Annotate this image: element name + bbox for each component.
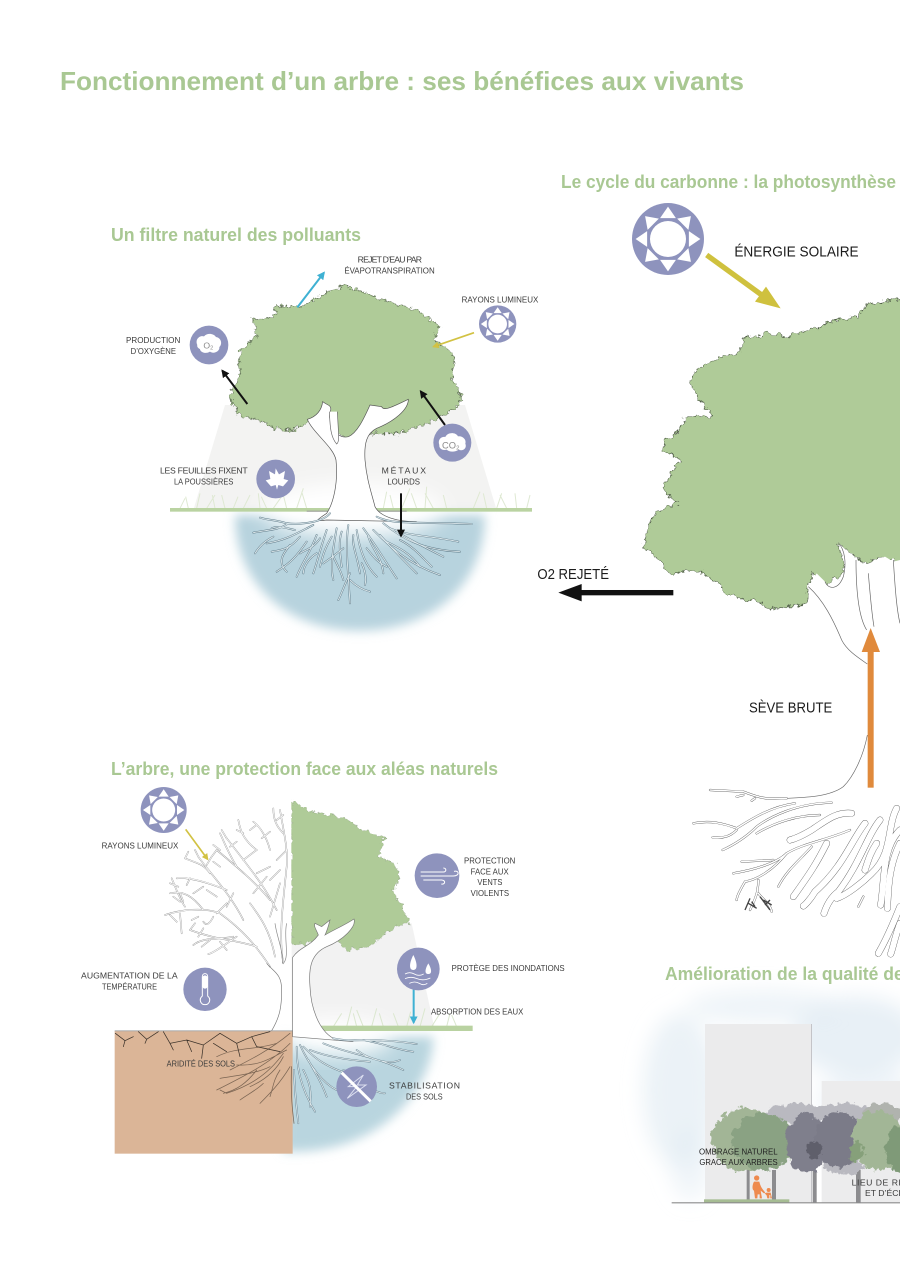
trunk xyxy=(307,399,417,522)
grass strip xyxy=(704,1199,789,1202)
canopy xyxy=(230,285,463,437)
grey shade under canopy xyxy=(193,405,497,510)
label: meeting place xyxy=(852,1177,900,1198)
label: O2 released: O2 REJETÉ xyxy=(537,566,609,583)
arrow: water absorption xyxy=(411,989,417,1023)
panel: protection face aux aléas xyxy=(81,759,565,1154)
labels: ABSORPTION DES EAUX xyxy=(431,1007,524,1017)
tree canopies xyxy=(712,1103,900,1173)
icon: CO2 xyxy=(433,424,471,462)
labels: VENTS xyxy=(477,877,503,887)
panel: amélioration de la qualité de vie xyxy=(643,964,900,1203)
bare tree xyxy=(165,808,287,1031)
arrow: raw sap xyxy=(862,628,880,788)
illustration: tree with pollutant filter xyxy=(126,254,539,631)
trunk left edge xyxy=(787,640,867,798)
big canopy xyxy=(643,287,900,610)
illustration: street scene xyxy=(643,990,900,1203)
labels: MÉTAUX xyxy=(382,465,426,475)
arrow: light rays xyxy=(433,333,474,347)
tree trunks xyxy=(747,1170,861,1202)
arrow: O2 released xyxy=(558,584,673,601)
arid soil xyxy=(115,1031,293,1154)
labels: STABILISATION xyxy=(389,1080,460,1090)
illustration: trunk and roots xyxy=(693,628,900,954)
icon: sun xyxy=(632,203,704,275)
heading: filtre: Un filtre naturel des polluants xyxy=(111,225,361,245)
illustration: photosynthesis canopy xyxy=(537,203,900,643)
ground line xyxy=(672,1202,900,1203)
labels xyxy=(126,254,539,486)
roots xyxy=(693,790,900,954)
icon: oxygen xyxy=(190,326,228,364)
sky haze xyxy=(643,990,900,1200)
people xyxy=(752,1175,772,1198)
grass xyxy=(115,1007,473,1031)
clean canopy edge mask xyxy=(277,793,291,950)
labels: LA POUSSIÈRES xyxy=(174,476,234,486)
title: Fonctionnement d’un arbre : ses bénéfices aux vivants xyxy=(60,66,744,96)
labels: PRODUCTION xyxy=(126,335,180,345)
icon: CO2: CO₂ xyxy=(442,441,460,451)
labels: FACE AUX xyxy=(471,866,509,876)
soil water zone xyxy=(235,515,485,631)
labels: PROTÈGE DES INONDATIONS xyxy=(452,963,565,973)
heading: cycle: Le cycle du carbonne : la photosynthèse xyxy=(561,172,896,192)
trunk outlines xyxy=(808,543,900,640)
labels: RAYONS LUMINEUX xyxy=(102,840,179,850)
panel: cycle du carbone xyxy=(537,172,900,954)
arrow: CO2 xyxy=(421,391,445,425)
arrow: solar energy xyxy=(707,255,781,308)
labels: LOURDS xyxy=(387,476,420,486)
labels: RAYONS LUMINEUX xyxy=(462,294,539,304)
icon: water drops xyxy=(397,948,440,990)
label: shade: GRACE AUX ARBRES xyxy=(699,1157,778,1167)
labels: D’OXYGÈNE xyxy=(131,346,176,356)
label: shade xyxy=(699,1146,778,1167)
arrow: oxygen xyxy=(222,371,247,404)
water zone xyxy=(283,1037,433,1152)
building right xyxy=(822,1081,900,1202)
labels: DES SOLS xyxy=(406,1091,443,1101)
dry roots and cracks xyxy=(115,1032,294,1123)
icon: sun xyxy=(141,787,187,833)
labels xyxy=(81,840,565,1101)
labels: LES FEUILLES FIXENT xyxy=(160,465,248,475)
icon: soil stabilisation xyxy=(336,1066,377,1107)
building left xyxy=(705,1024,812,1202)
white area near roots xyxy=(280,1018,393,1055)
trunk opening xyxy=(808,543,900,643)
icon: leaf xyxy=(256,460,295,498)
healthy roots xyxy=(294,1038,417,1123)
illustration: half bare tree, half healthy tree xyxy=(81,787,565,1154)
label: raw sap: SÈVE BRUTE xyxy=(749,700,833,717)
white area near roots xyxy=(263,483,443,537)
icon: wind xyxy=(415,853,459,898)
labels: ÉVAPOTRANSPIRATION xyxy=(344,266,435,276)
icon: thermometer xyxy=(183,968,227,1011)
healthy trunk xyxy=(293,919,354,1042)
trunk inner branch xyxy=(329,412,339,444)
label: solar energy: ÉNERGIE SOLAIRE xyxy=(734,243,859,260)
label: shade: OMBRAGE NATUREL xyxy=(699,1146,778,1156)
panel: filtre naturel des polluants xyxy=(111,225,539,631)
arrow: rays xyxy=(186,829,208,859)
building edge xyxy=(811,1024,812,1202)
root tips xyxy=(745,897,772,910)
labels: TEMPÉRATURE xyxy=(102,982,157,992)
labels: PROTECTION xyxy=(464,855,515,865)
roots xyxy=(253,513,472,603)
grey shade xyxy=(292,923,435,1031)
labels: AUGMENTATION DE LA xyxy=(81,971,178,981)
icon: oxygen: O₂ xyxy=(203,341,213,351)
labels: VIOLENTS xyxy=(471,888,509,898)
arrow: evapotranspiration xyxy=(297,273,324,307)
labels: REJET D’EAU PAR xyxy=(358,254,422,264)
heading: protection: L’arbre, une protection face aux aléas naturels xyxy=(111,759,498,779)
grass xyxy=(170,487,532,512)
labels: ARIDITÉ DES SOLS xyxy=(167,1058,235,1068)
arrow: heavy metals xyxy=(398,493,404,536)
half canopy xyxy=(291,801,410,950)
icon: sun xyxy=(479,305,516,343)
